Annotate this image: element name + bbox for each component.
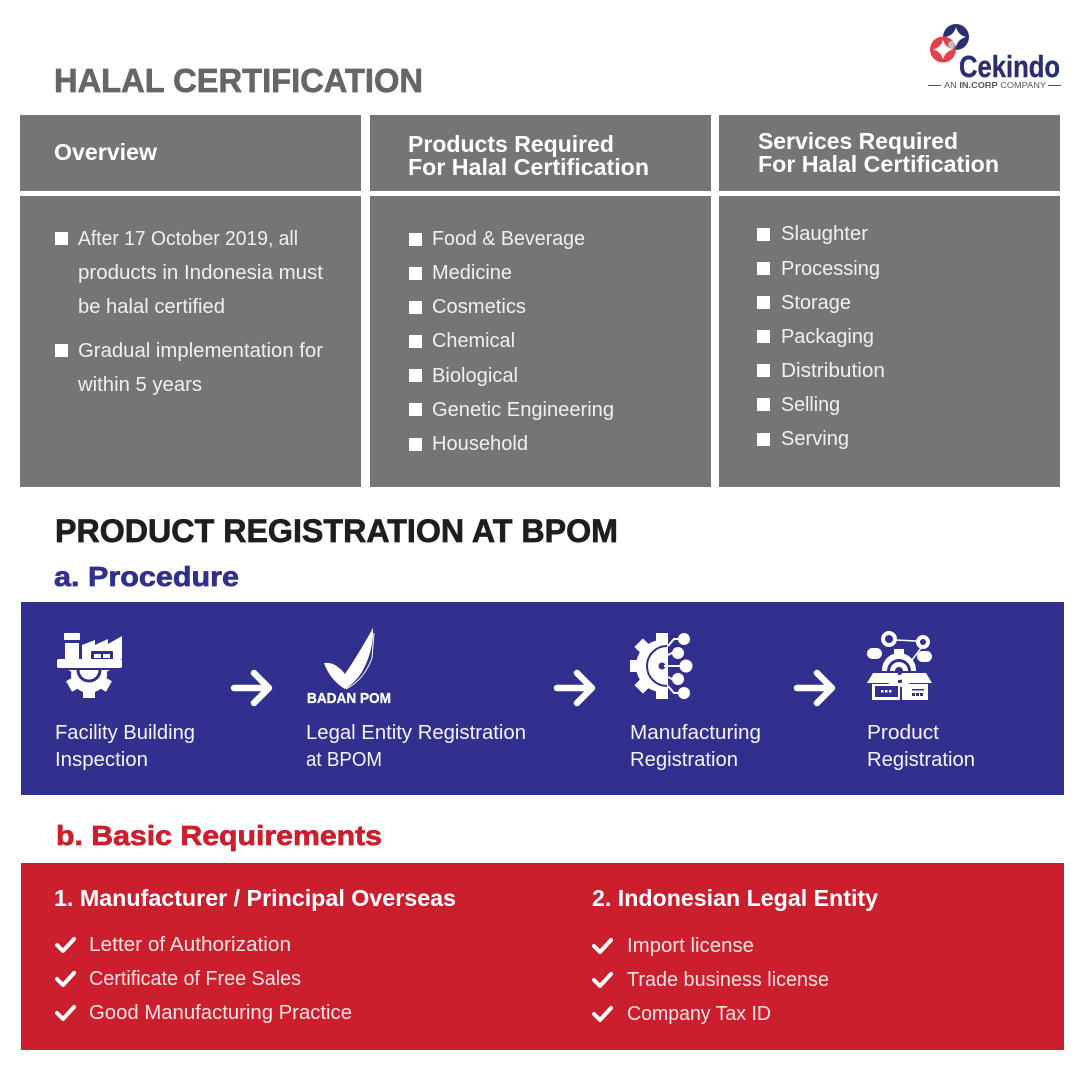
panel: services list: Slaughter bbox=[781, 223, 868, 245]
title: Halal Certification: HALAL CERTIFICATION bbox=[54, 62, 423, 99]
panel: products header: For Halal Certification bbox=[408, 154, 649, 180]
panel: products list: Cosmetics bbox=[432, 296, 526, 318]
list: manufacturer bbox=[54, 885, 456, 1024]
panel: services list: Processing bbox=[781, 258, 880, 280]
panel: procedure: at BPOM bbox=[306, 749, 382, 771]
list: Indonesian legal entity: 2. Indonesian Legal Entity bbox=[592, 885, 878, 911]
panel: procedure: Manufacturing bbox=[630, 722, 761, 744]
panel: services header: Services Required bbox=[758, 128, 958, 154]
panel: procedure bbox=[21, 602, 1064, 795]
panel: procedure: Product bbox=[867, 722, 939, 744]
panel: overview body bbox=[20, 196, 361, 487]
panel: services list: Selling bbox=[781, 394, 840, 416]
list: Indonesian legal entity: Company Tax ID bbox=[627, 1003, 771, 1025]
panel: services header bbox=[719, 115, 1060, 191]
icon: Badan POM: BADAN POM bbox=[307, 691, 391, 707]
logo: Cekindo bbox=[928, 24, 1061, 90]
panel: procedure: Legal Entity Registration bbox=[306, 722, 526, 744]
panel: services list: Storage bbox=[781, 292, 851, 314]
panel: products list: Household bbox=[432, 433, 528, 455]
panel: products list bbox=[370, 196, 711, 487]
panel: services list: Packaging bbox=[781, 326, 874, 348]
logo: Cekindo: AN IN.CORP COMPANY bbox=[944, 81, 1047, 90]
panel: products list: Chemical bbox=[432, 330, 515, 352]
icon: product box bbox=[866, 633, 933, 700]
arrow bbox=[797, 673, 832, 703]
panel: services list bbox=[719, 196, 1060, 487]
panel: procedure: Registration bbox=[630, 749, 738, 771]
list: manufacturer: Letter of Authorization bbox=[89, 934, 291, 956]
panel: procedure: Inspection bbox=[55, 749, 148, 771]
list: Indonesian legal entity bbox=[592, 885, 878, 1025]
arrow bbox=[557, 673, 592, 703]
panel: procedure: Facility Building bbox=[55, 722, 195, 744]
panel: overview header: Overview bbox=[54, 139, 157, 165]
heading: b. Basic Requirements: b. Basic Requirements bbox=[56, 820, 382, 851]
panel: products list: Biological bbox=[432, 365, 518, 387]
panel: overview body: Gradual implementation for bbox=[78, 340, 323, 362]
panel: products header bbox=[370, 115, 711, 191]
panel: products list: Medicine bbox=[432, 262, 512, 284]
icon: Badan POM bbox=[307, 628, 391, 707]
heading: Product Registration at BPOM: PRODUCT REGISTRATION AT BPOM bbox=[55, 513, 618, 549]
logo: Cekindo: Cekindo bbox=[959, 49, 1060, 84]
panel: services list: Serving bbox=[781, 428, 849, 450]
panel: products list: Genetic Engineering bbox=[432, 399, 614, 421]
arrow bbox=[234, 673, 269, 703]
list: Indonesian legal entity: Import license bbox=[627, 935, 754, 957]
panel: basic requirements bbox=[21, 863, 1064, 1050]
panel: procedure: Registration bbox=[867, 749, 975, 771]
icon: gear circuit bbox=[630, 630, 694, 702]
panel: overview body: products in Indonesia must bbox=[78, 262, 323, 284]
list: manufacturer: 1. Manufacturer / Principal Overseas bbox=[54, 885, 456, 911]
panel: overview body: After 17 October 2019, all bbox=[78, 228, 298, 250]
heading: a. Procedure: a. Procedure bbox=[54, 561, 239, 592]
panel: products list: Food & Beverage bbox=[432, 228, 585, 250]
panel: overview body: be halal certified bbox=[78, 296, 225, 318]
icon: factory gear bbox=[56, 633, 123, 698]
list: manufacturer: Certificate of Free Sales bbox=[89, 968, 301, 990]
panel: overview header bbox=[20, 115, 361, 191]
panel: services list: Distribution bbox=[781, 360, 885, 382]
list: Indonesian legal entity: Trade business license bbox=[627, 969, 829, 991]
panel: overview body: within 5 years bbox=[77, 374, 202, 396]
panel: products header: Products Required bbox=[408, 131, 614, 157]
list: manufacturer: Good Manufacturing Practice bbox=[89, 1002, 352, 1024]
panel: services header: For Halal Certification bbox=[758, 151, 999, 177]
